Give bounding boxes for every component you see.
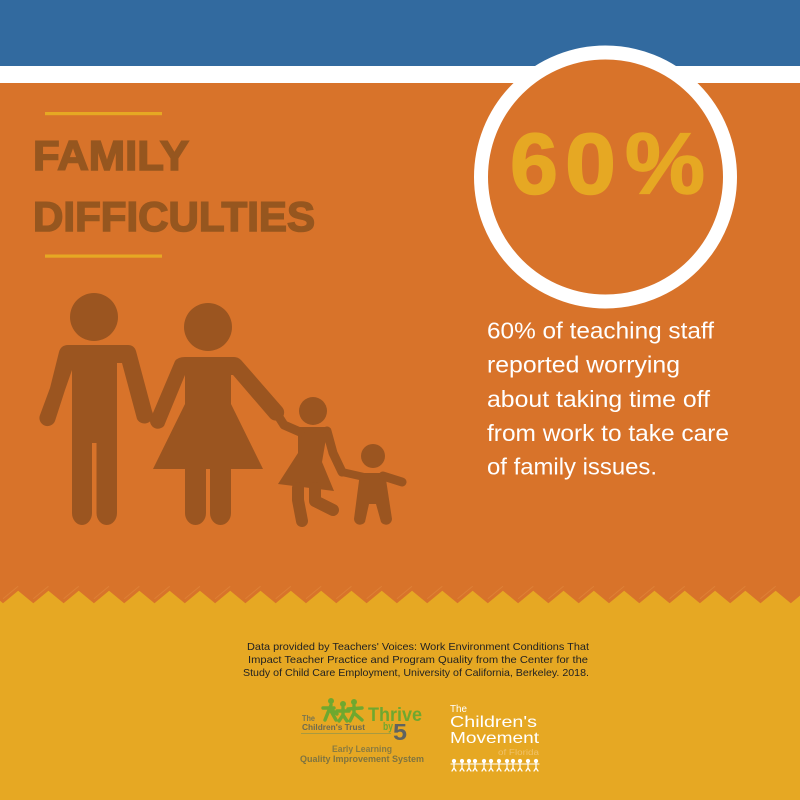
stat circle: 60%: [481, 52, 730, 302]
text block: description: of family issues.: [487, 454, 657, 480]
panel: blue header band: [0, 0, 800, 66]
text block: data source: Study of Child Care Employment, University of California, Berkeley. 2018.: [243, 667, 589, 679]
logo: The Children's Movement of Florida: of Florida: [498, 748, 540, 757]
stat circle: 60%: 6: [510, 116, 558, 212]
text block: data source: [243, 641, 589, 679]
logo: The Children's Trust Thrive by 5: [300, 698, 424, 764]
stat circle: 60%: %: [625, 116, 705, 212]
logo: The Children's Movement of Florida: Children's: [450, 714, 537, 731]
logo: The Children's Trust Thrive by 5: Quality Improvement System: [300, 754, 424, 764]
white stripe: [0, 66, 800, 83]
text block: data source: Data provided by Teachers' Voices: Work Environment Conditions That: [247, 641, 589, 653]
logo: The Children's Trust Thrive by 5: Early Learning: [332, 744, 392, 754]
woman: [150, 303, 284, 525]
text block: description: reported worrying: [487, 352, 680, 378]
logo: The Children's Trust Thrive by 5: by: [383, 721, 394, 733]
toddler: [342, 444, 402, 525]
text block: description: from work to take care: [487, 420, 729, 446]
icon: green children: [323, 698, 362, 721]
logo: The Children's Trust Thrive by 5: 5: [393, 719, 407, 745]
panel: yellow footer with zigzag edge: [0, 591, 800, 800]
logo: The Children's Trust Thrive by 5: Children's Trust: [302, 722, 365, 732]
text block: description: 60% of teaching staff: [487, 318, 715, 344]
logo: The Children's Movement of Florida: Movement: [450, 730, 540, 747]
girl: [277, 397, 342, 521]
text block: description: about taking time off: [487, 386, 711, 412]
text block: description: [487, 318, 729, 480]
stat circle: 60%: 0: [565, 116, 616, 212]
man: [39, 293, 153, 525]
zigzag highlight strokes: [0, 586, 776, 599]
logo: The Children's Movement of Florida: [450, 704, 540, 771]
logo: The Children's Trust Thrive by 5: The: [302, 713, 315, 723]
heading: family difficulties: [33, 112, 315, 258]
heading: family difficulties: FAMILY: [33, 132, 189, 179]
logo: The Children's Trust Thrive by 5: Thrive: [368, 705, 422, 726]
text block: data source: Impact Teacher Practice and Program Quality from the Center for the: [248, 654, 588, 666]
logo: The Children's Movement of Florida: The: [450, 704, 467, 715]
heading: family difficulties: DIFFICULTIES: [33, 193, 315, 240]
icon: family holding hands: [39, 293, 402, 525]
icon: paper-chain people: [451, 760, 539, 771]
panel: orange background: [0, 83, 800, 613]
